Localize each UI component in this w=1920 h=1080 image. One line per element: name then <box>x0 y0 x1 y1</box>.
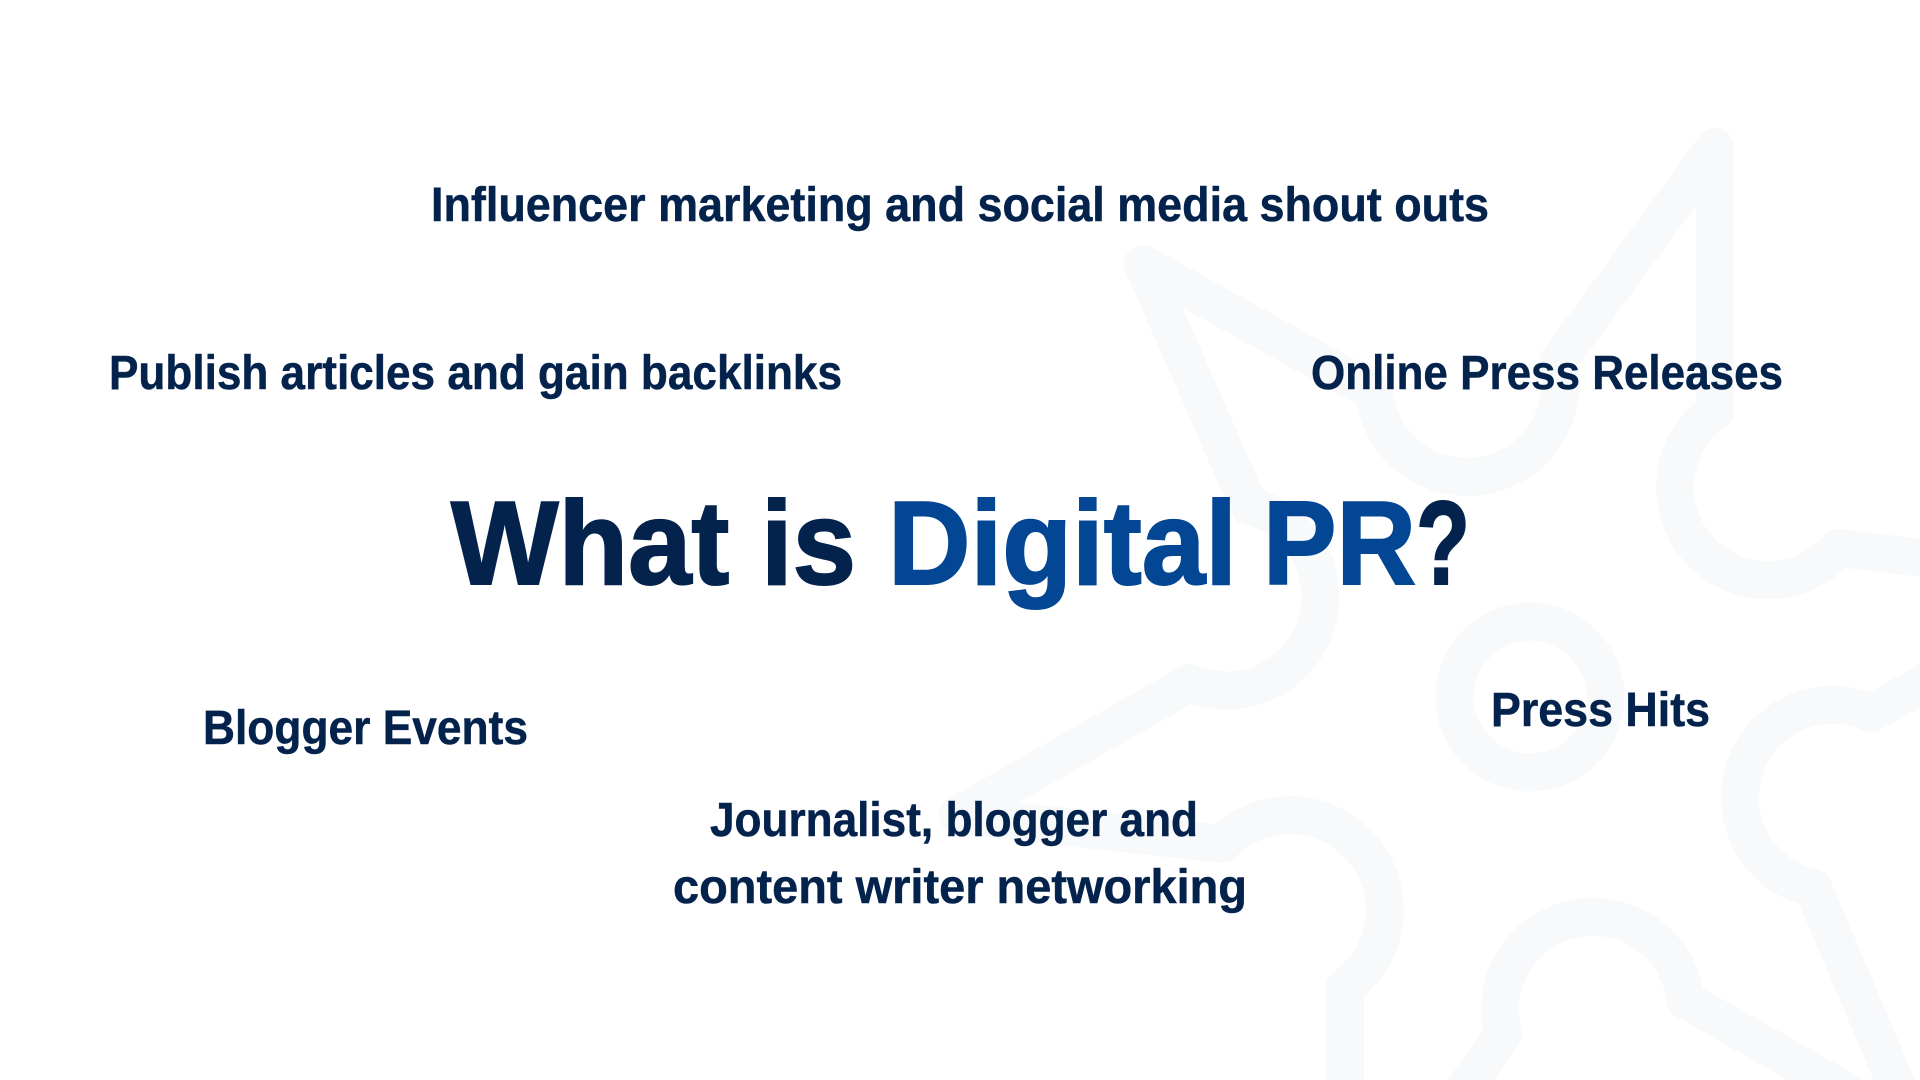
title: What is Digital PR?: Digital <box>888 477 1237 610</box>
item: journalist networking <box>673 794 1247 914</box>
title: What is Digital PR?: PR <box>1263 477 1416 610</box>
watermark centre circle <box>1454 622 1606 772</box>
watermark star outline <box>958 147 1920 1080</box>
item: influencer marketing: Influencer marketing and social media shout outs <box>431 179 1489 232</box>
item: journalist networking: Journalist, blogger and <box>710 794 1198 847</box>
title: What is Digital PR?: ? <box>1416 477 1470 610</box>
title: What is Digital PR?: What is <box>451 477 856 610</box>
item: blogger events: Blogger Events <box>203 702 528 755</box>
watermark: puzzle star logo <box>958 147 1920 1080</box>
item: press hits: Press Hits <box>1491 684 1710 737</box>
item: online press releases: Online Press Releases <box>1311 347 1783 400</box>
item: publish articles: Publish articles and gain backlinks <box>109 347 842 400</box>
item: journalist networking: content writer networking <box>673 861 1247 914</box>
title: What is Digital PR? <box>451 477 1470 610</box>
